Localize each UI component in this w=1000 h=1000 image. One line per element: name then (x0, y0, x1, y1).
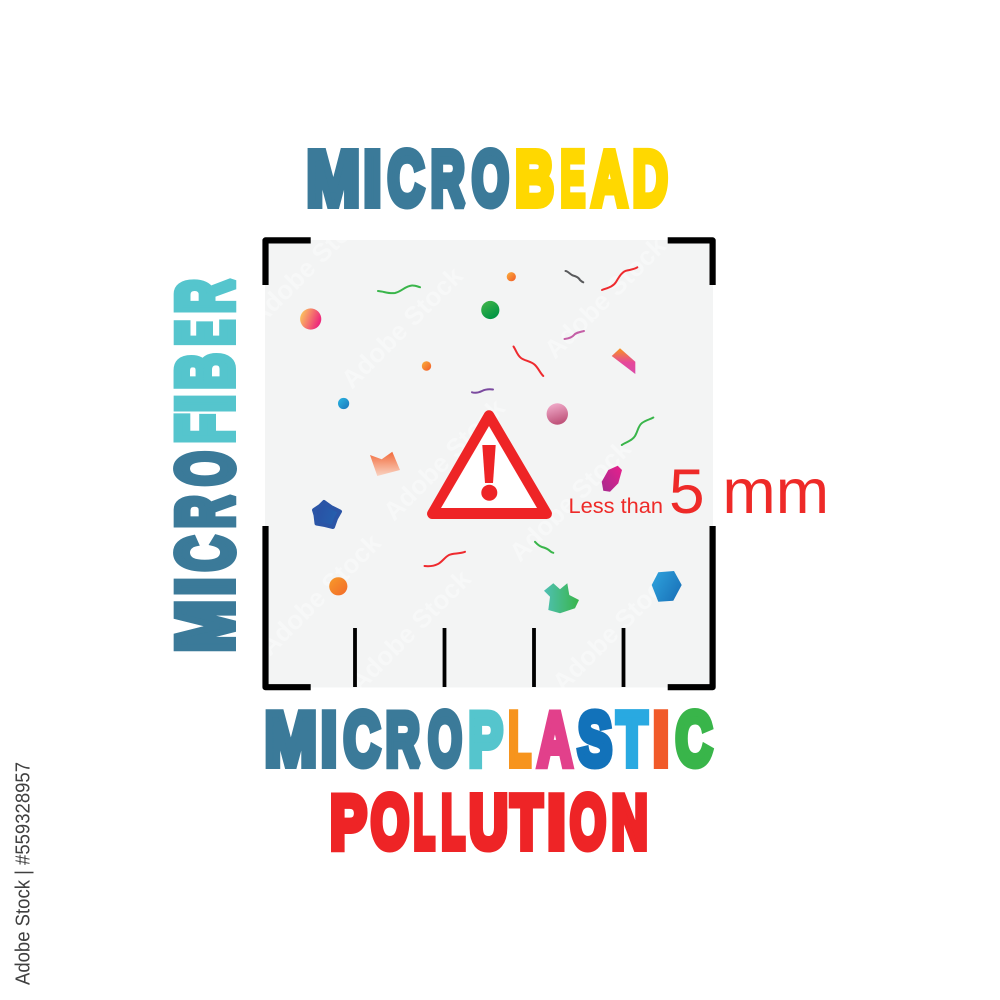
heading: MICROBEAD: M (307, 136, 360, 222)
heading: MICROPLASTIC multicolour: S (578, 698, 612, 782)
stock credit vertical: Adobe Stock | #559328957 (12, 762, 34, 985)
heading: MICROBEAD: B (515, 136, 554, 222)
watermark overlay: Adobe Stock (243, 197, 377, 331)
icon: warning triangle (432, 416, 547, 514)
frame: corner brackets and ruler ticks (266, 240, 713, 687)
heading: MICROPLASTIC multicolour: T (617, 698, 647, 782)
heading: MICROBEAD: R (431, 136, 465, 222)
heading: POLLUTION: L (441, 781, 465, 865)
heading: MICROFIBER vertical: E (161, 320, 249, 346)
heading: MICROFIBER vertical: O (161, 451, 249, 486)
microfibers: squiggles (378, 267, 653, 566)
heading: POLLUTION: U (469, 781, 508, 865)
heading: MICROFIBER vertical: R (161, 495, 249, 528)
heading: MICROFIBER vertical: B (161, 353, 249, 390)
heading: POLLUTION: O (570, 781, 606, 865)
heading: MICROBEAD: D (633, 136, 668, 222)
watermark overlay: Adobe Stock (538, 230, 672, 364)
microbeads: spheres (300, 272, 568, 595)
heading: POLLUTION: L (414, 781, 435, 865)
heading: MICROFIBER vertical: R (161, 279, 249, 313)
heading: MICROPLASTIC multicolour: C (344, 698, 380, 782)
heading: MICROBEAD: O (472, 136, 509, 222)
heading: MICROPLASTIC multicolour (265, 698, 712, 782)
heading: MICROFIBER vertical: M (161, 600, 249, 652)
heading: MICROPLASTIC multicolour: O (428, 698, 462, 782)
heading: MICROFIBER vertical: I (161, 578, 249, 596)
heading: MICROBEAD: A (592, 136, 627, 222)
watermark overlay (243, 197, 680, 697)
heading: POLLUTION: I (548, 781, 565, 865)
heading: MICROPLASTIC multicolour: A (538, 698, 572, 782)
heading: MICROFIBER vertical (161, 279, 249, 652)
heading: MICROBEAD: I (364, 136, 381, 222)
watermark overlay: Adobe Stock (546, 563, 680, 697)
heading: MICROPLASTIC multicolour: L (508, 698, 531, 782)
watermark overlay: Adobe Stock (503, 433, 637, 567)
heading: POLLUTION: P (330, 781, 367, 865)
watermark overlay: Adobe Stock (335, 260, 469, 394)
heading: MICROBEAD (307, 136, 668, 222)
heading: MICROPLASTIC multicolour: M (265, 698, 317, 782)
size label: less than 5 mm: 5 mm (669, 457, 829, 527)
panel: sample square (265, 240, 713, 688)
watermark overlay: Adobe Stock (253, 527, 387, 661)
heading: POLLUTION (330, 781, 648, 865)
heading: MICROPLASTIC multicolour: P (469, 698, 503, 782)
heading: POLLUTION: T (511, 781, 542, 865)
heading: MICROBEAD: C (388, 136, 424, 222)
heading: MICROPLASTIC multicolour: I (321, 698, 337, 782)
heading: MICROBEAD: E (560, 136, 585, 222)
heading: MICROFIBER vertical: C (161, 536, 249, 571)
size label: less than 5 mm (568, 457, 829, 527)
heading: POLLUTION: N (612, 781, 648, 865)
heading: POLLUTION: O (371, 781, 409, 865)
microplastic fragments (314, 348, 682, 613)
heading: MICROPLASTIC multicolour: C (676, 698, 712, 782)
watermark overlay: Adobe Stock (343, 563, 477, 697)
heading: MICROFIBER vertical: F (161, 414, 249, 443)
watermark overlay: Adobe Stock (377, 392, 511, 526)
heading: MICROPLASTIC multicolour: R (386, 698, 420, 782)
heading: MICROPLASTIC multicolour: I (653, 698, 669, 782)
size label: less than 5 mm: Less than (568, 495, 663, 518)
heading: MICROFIBER vertical: I (161, 395, 249, 412)
